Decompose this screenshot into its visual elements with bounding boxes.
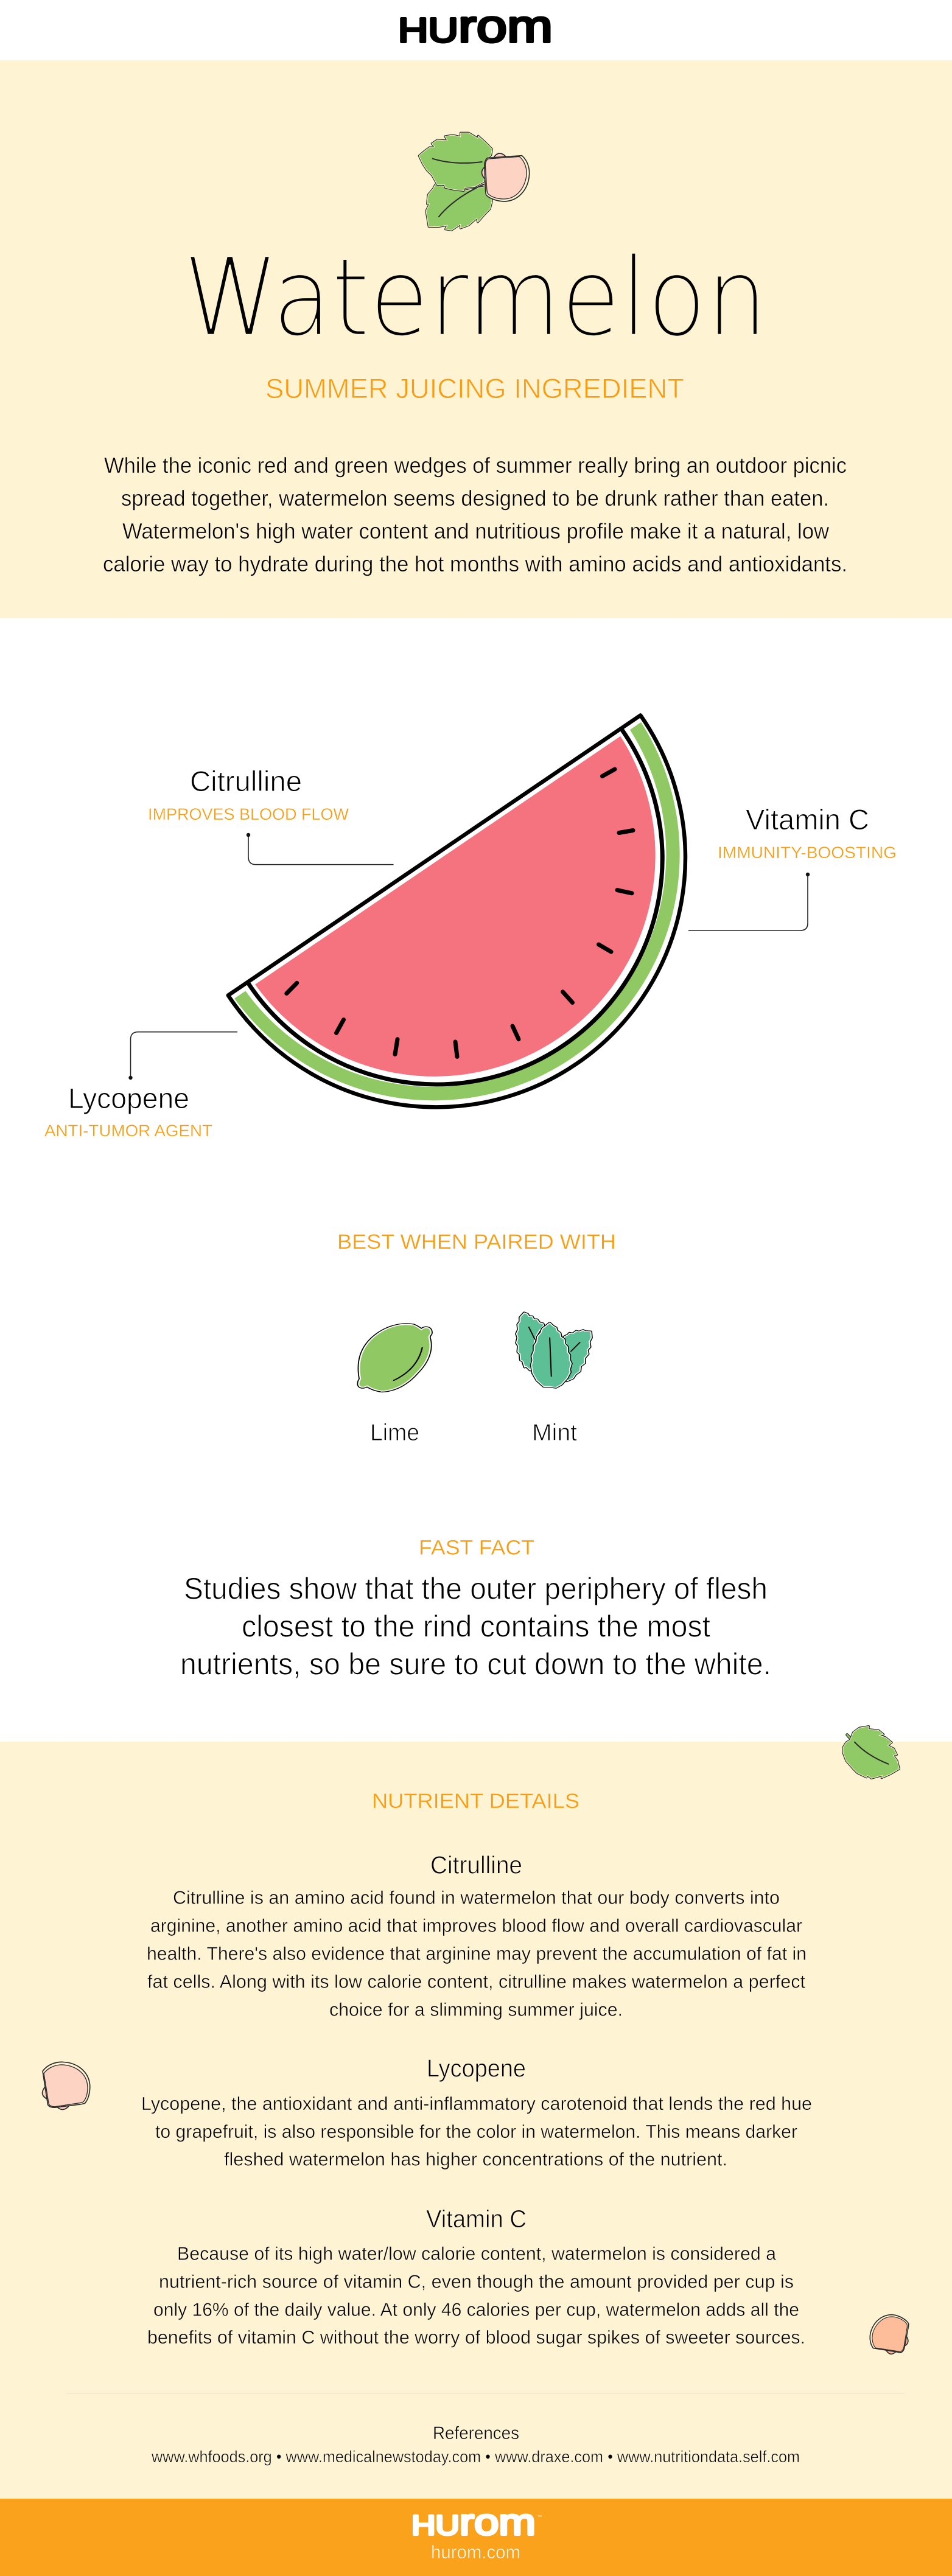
section: Lycopene xyxy=(141,2054,812,2170)
panel: intro background xyxy=(0,60,952,618)
callout: Vitamin C xyxy=(688,803,897,930)
callout: Lycopene: Lycopene xyxy=(68,1082,189,1114)
section: Citrulline: health. There's also evidence that arginine may prevent the accumulation of fat in xyxy=(147,1942,807,1964)
intro text xyxy=(103,453,847,576)
text: fast fact: Studies show that the outer periphery of flesh xyxy=(184,1571,768,1605)
section: Vitamin C: only 16% of the daily value. At only 46 calories per cup, watermelon adds all the xyxy=(153,2299,799,2320)
heading: best when paired with: BEST WHEN PAIRED WITH xyxy=(337,1230,616,1254)
text: fast fact: nutrients, so be sure to cut down to the white. xyxy=(180,1647,771,1681)
seeds xyxy=(287,769,633,1056)
icon: lime xyxy=(359,1324,431,1391)
heading: nutrient details: NUTRIENT DETAILS xyxy=(372,1790,579,1813)
footer band xyxy=(0,2499,952,2576)
section: Lycopene: to grapefruit, is also responsible for the color in watermelon. This means darker xyxy=(155,2121,797,2142)
green rind xyxy=(234,722,680,1100)
callout: Vitamin C: Vitamin C xyxy=(746,803,869,836)
references: References xyxy=(433,2423,519,2443)
section: Vitamin C: Vitamin C xyxy=(426,2205,527,2233)
icon: decorative citrus pink xyxy=(40,2059,92,2111)
section: Lycopene: Lycopene xyxy=(427,2054,526,2082)
icon: decorative leaf xyxy=(843,1726,899,1778)
icon: leaves and citrus xyxy=(419,133,530,230)
panel: nutrient details background xyxy=(0,1742,952,2499)
section: Citrulline: arginine, another amino acid that improves blood flow and overall cardiovascular xyxy=(150,1915,802,1936)
label: lime: Lime xyxy=(370,1420,419,1446)
section: Citrulline: fat cells. Along with its low calorie content, citrulline makes watermelon a perfect xyxy=(147,1970,805,1992)
title: Watermelon xyxy=(183,235,768,360)
icon: decorative citrus orange xyxy=(867,2311,913,2357)
red flesh xyxy=(255,736,656,1077)
inner rind line xyxy=(248,728,662,1084)
heading: fast fact: FAST FACT xyxy=(419,1536,534,1559)
section: Lycopene: Lycopene, the antioxidant and anti-inflammatory carotenoid that lends the red hue xyxy=(141,2093,812,2114)
references xyxy=(151,2423,800,2466)
section: Citrulline xyxy=(147,1851,807,2020)
outer rind outline xyxy=(228,715,685,1107)
logo: hurom: HUrom xyxy=(398,1,553,52)
section: Citrulline: choice for a slimming summer juice. xyxy=(329,1998,623,2020)
text: fast fact xyxy=(180,1571,771,1681)
section: Citrulline: Citrulline xyxy=(430,1851,522,1879)
footer logo: ™ xyxy=(537,2515,542,2519)
section: Vitamin C: benefits of vitamin C without the worry of blood sugar spikes of sweeter sources. xyxy=(147,2326,805,2348)
callout: Lycopene xyxy=(44,1032,237,1140)
section: Citrulline: Citrulline is an amino acid found in watermelon that our body converts into xyxy=(173,1887,780,1908)
callout: Vitamin C: IMMUNITY-BOOSTING xyxy=(718,843,897,862)
callout: Citrulline xyxy=(148,765,393,865)
references: www.whfoods.org • www.medicalnewstoday.com • www.draxe.com • www.nutritiondata.self.com xyxy=(151,2448,800,2466)
section: Vitamin C: nutrient-rich source of vitamin C, even though the amount provided per cup is xyxy=(159,2271,794,2292)
callout: Citrulline: Citrulline xyxy=(190,765,302,797)
footer logo: HUrom xyxy=(411,2502,536,2543)
section: Vitamin C: Because of its high water/low calorie content, watermelon is considered a xyxy=(177,2243,777,2264)
subtitle: SUMMER JUICING INGREDIENT xyxy=(265,373,684,404)
label: mint: Mint xyxy=(532,1420,577,1446)
footer url: hurom.com xyxy=(431,2541,520,2563)
callout: Citrulline: IMPROVES BLOOD FLOW xyxy=(148,805,349,823)
icon: mint xyxy=(517,1313,591,1387)
chart: watermelon wedge xyxy=(228,715,685,1107)
intro text: calorie way to hydrate during the hot months with amino acids and antioxidants. xyxy=(103,551,847,576)
intro text: spread together, watermelon seems designed to be drunk rather than eaten. xyxy=(121,486,829,511)
intro text: While the iconic red and green wedges of summer really bring an outdoor picnic xyxy=(104,453,847,478)
callout: Lycopene: ANTI-TUMOR AGENT xyxy=(44,1122,212,1140)
text: fast fact: closest to the rind contains the most xyxy=(242,1609,710,1643)
intro text: Watermelon's high water content and nutritious profile make it a natural, low xyxy=(122,518,830,543)
section: Vitamin C xyxy=(147,2205,805,2348)
header band xyxy=(0,0,952,60)
section: Lycopene: fleshed watermelon has higher concentrations of the nutrient. xyxy=(224,2148,727,2170)
